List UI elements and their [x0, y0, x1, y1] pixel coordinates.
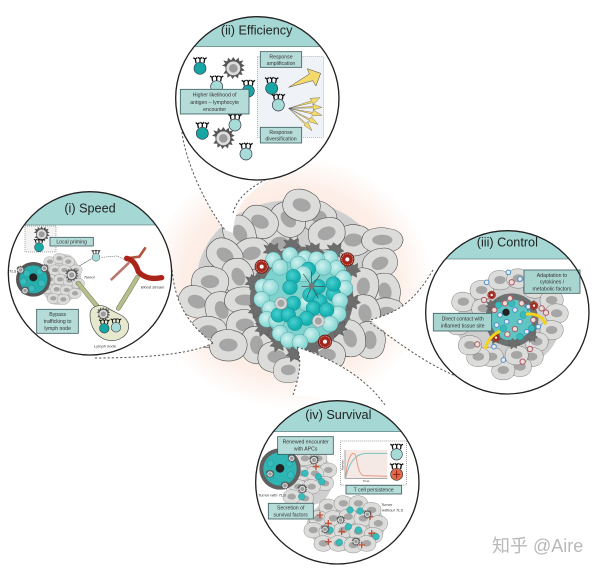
- tumor without TLS: [304, 496, 388, 553]
- TLS core: [485, 293, 538, 349]
- yellow amplification arrow: [289, 69, 321, 87]
- callout: direct contact: [433, 313, 492, 331]
- callout: bypass: Bypass: [49, 312, 67, 318]
- callout: bypass: trafficking to: [44, 319, 72, 325]
- label: tumor with TLS: Tumor with TLS: [258, 493, 286, 498]
- label: tumor without TLS: [381, 502, 404, 513]
- title: (iv) Survival: [305, 408, 371, 422]
- callout: diversification: diversification: [265, 137, 297, 143]
- callout: amplification: amplification: [267, 61, 295, 67]
- callout: secretion: [268, 503, 313, 519]
- yellow diversification arrows: [289, 98, 322, 131]
- lymphatic vessels: [78, 277, 137, 308]
- callout: diversification: [260, 127, 302, 143]
- header band: [24, 192, 156, 225]
- callout: local priming: Local priming: [56, 240, 87, 246]
- chart: Number: [341, 459, 345, 470]
- callout: secretion: survival factors: [273, 512, 308, 518]
- callout: renewed encounter: with APCs: [294, 447, 318, 453]
- dashed connectors: [93, 132, 473, 405]
- callout: adaptation: cytokines /: [540, 280, 565, 286]
- callout: amplification: [260, 52, 302, 67]
- title: (iii) Control: [477, 236, 538, 250]
- infiltrating cell rings: [475, 270, 549, 364]
- callout: antigen encounter: [180, 89, 249, 114]
- yellow arrows: [485, 314, 546, 349]
- persistence chart panel: [340, 441, 406, 485]
- header band: [194, 17, 321, 47]
- header band: [273, 401, 401, 432]
- callout: adaptation: [524, 270, 580, 293]
- panel: (ii) Efficiency: [176, 17, 339, 180]
- panel outline: [256, 401, 419, 564]
- callout: local priming: [50, 237, 93, 246]
- dotted response panel: [257, 57, 323, 137]
- callout: bypass: [37, 309, 78, 333]
- lymph node: [90, 306, 129, 341]
- callout: T cell persistence: [346, 485, 402, 494]
- callout: bypass: lymph node: [44, 326, 71, 332]
- callout: antigen encounter: encounter: [203, 107, 226, 113]
- panel: (i) Speed: [8, 192, 172, 355]
- header band: [446, 231, 569, 259]
- panel: (iii) Control: [426, 231, 589, 394]
- chart: [341, 450, 387, 483]
- callout: direct contact: inflamed tissue site: [441, 324, 485, 330]
- chart: Time: [363, 479, 370, 483]
- white connector wedges: [93, 132, 473, 405]
- title: (ii) Efficiency: [221, 23, 293, 37]
- callout: adaptation: Adaptation to: [537, 273, 567, 279]
- dark stromal ring: [245, 238, 361, 362]
- panel: (iv) Survival: [256, 401, 419, 564]
- chart legend cells: [390, 444, 403, 480]
- callout: amplification: Response: [269, 54, 293, 60]
- teal T cell cluster: [254, 247, 353, 350]
- label: tumor: Tumor: [84, 275, 96, 280]
- callout: secretion: Secretion of: [277, 506, 305, 512]
- panel outline: [176, 17, 339, 180]
- watermark: 知乎 @Aire: [492, 536, 583, 556]
- cells in lymph node: [97, 307, 121, 333]
- dendritic cells: [488, 291, 538, 342]
- title: (i) Speed: [64, 202, 116, 216]
- glow behind central tumor: [148, 156, 432, 408]
- TLS mini cluster: [16, 262, 51, 297]
- tumor with TLS: [259, 448, 337, 506]
- callout: adaptation: metabolic factors: [532, 287, 572, 293]
- central tumor: [174, 185, 405, 383]
- blood vessel: [112, 248, 162, 279]
- callout: antigen encounter: Higher likelihood of: [193, 93, 237, 99]
- outer gray tumor cells: [174, 185, 405, 383]
- migrating T cell and arrow: [79, 250, 127, 266]
- callout: T cell persistence: T cell persistence: [354, 488, 394, 494]
- panel outline: [426, 231, 589, 394]
- T cells and antigen presenting cells: [193, 57, 285, 160]
- label: TLS: TLS: [9, 269, 17, 274]
- inflamed tumor cells: [447, 269, 568, 380]
- label: tumor without TLS: Tumor: [381, 502, 393, 507]
- panel outline: [8, 192, 172, 355]
- callout: direct contact: Direct contact with: [442, 317, 484, 323]
- label: lymph node: Lymph node: [94, 343, 117, 348]
- label: tumor without TLS: without TLS: [382, 508, 404, 513]
- callout: renewed encounter: Renewed encounter: [283, 440, 329, 446]
- local priming dashed box: [25, 226, 56, 252]
- label: blood stream: Blood stream: [141, 285, 165, 290]
- tumor mini cluster: [39, 253, 85, 305]
- callout: renewed encounter: [278, 437, 333, 454]
- red dendritic cells: [255, 253, 354, 348]
- callout: diversification: Response: [269, 130, 293, 136]
- callout: antigen encounter: antigen – lymphocyte: [190, 100, 239, 106]
